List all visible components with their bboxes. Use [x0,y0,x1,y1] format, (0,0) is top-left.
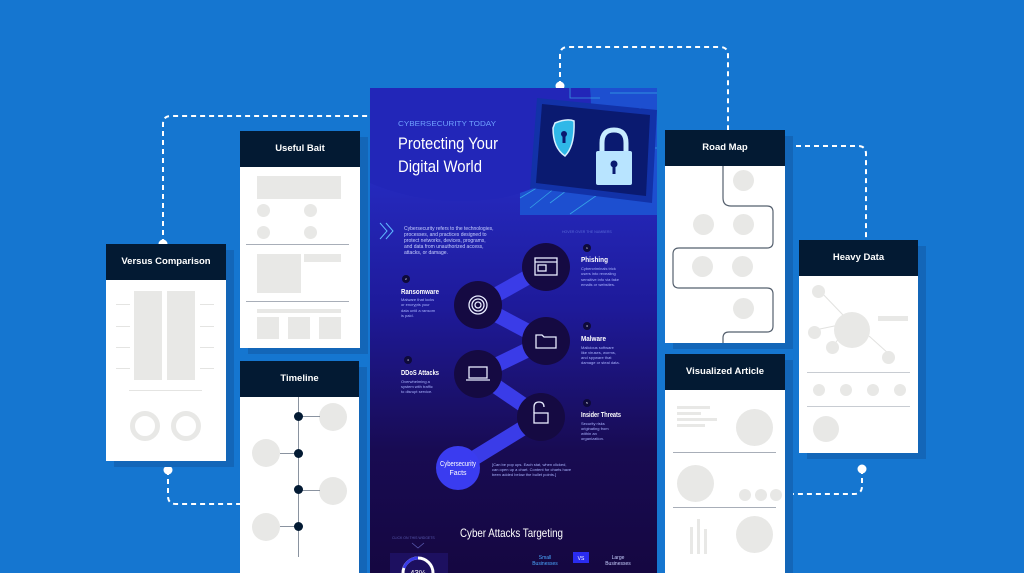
labels: 3 [586,324,588,328]
title: Digital World [398,157,482,176]
card: Timeline: Timeline [280,373,319,384]
card: Heavy Data: Heavy Data [833,252,884,263]
card: Heavy Data [799,240,918,453]
intro text: attacks, or damage. [404,250,448,256]
card: Visualized Article [665,354,785,573]
card: Road Map: Road Map [702,142,748,153]
labels: originating from [581,426,609,431]
labels [401,244,621,477]
labels: Insider Threats [581,410,621,419]
labels: emails or websites. [581,282,615,287]
zigzag diagram: Facts [449,470,467,477]
labels: Malware that locks [401,297,434,302]
labels: Ransomware [401,287,439,296]
card: Visualized Article: Visualized Article [686,366,764,377]
section: Cyber Attacks Targeting: VS [578,556,585,562]
labels: or encrypts your [401,302,430,307]
labels: to disrupt service. [401,389,432,394]
intro text: protect networks, devices, programs, [404,238,486,244]
labels: Malware [581,334,606,343]
labels: and spyware that [581,355,612,360]
card: Timeline [240,361,359,573]
labels: Malicious software [581,345,615,350]
title: CYBERSECURITY TODAY [398,119,496,128]
card: Road Map [665,130,785,343]
section: Cyber Attacks Targeting: Businesses [532,561,558,567]
labels: Cybercriminals trick [581,266,616,271]
section: Cyber Attacks Targeting: Large [612,555,625,561]
intro text [380,223,612,256]
section: Cyber Attacks Targeting: Small [539,555,551,561]
labels: 4 [407,358,409,362]
title [398,119,498,176]
labels: damage or steal data. [581,360,620,365]
labels: data until a ransom [401,308,436,313]
icon: shield [553,120,574,156]
labels: sensitive info via fake [581,277,620,282]
labels: users into revealing [581,271,616,276]
central infographic panel [370,88,657,573]
card: Useful Bait [240,131,360,348]
card: Useful Bait: Useful Bait [275,143,325,154]
zigzag diagram: Cybersecurity [440,461,476,468]
hero image: circuit & laptop [370,88,657,215]
labels: 2 [405,277,407,281]
title: Protecting Your [398,134,498,153]
card: Versus Comparison [106,244,226,461]
labels: is paid. [401,313,414,318]
labels: Security risks [581,421,605,426]
intro text: HOVER OVER THE NUMBERS [562,230,612,234]
labels: like viruses, worms, [581,350,616,355]
intro text: and data from unauthorized access, [404,244,484,250]
icon: padlock [602,130,626,153]
section: Cyber Attacks Targeting: CLICK ON THIS WIDGETS [392,536,435,540]
labels: DDoS Attacks [401,368,439,377]
intro text: Cybersecurity refers to the technologies, [404,226,494,232]
zigzag diagram [436,243,570,490]
intro text: processes, and practices designed to [404,232,487,238]
labels: Phishing [581,255,608,264]
labels: organization. [581,436,604,441]
labels: within an [581,431,597,436]
section: Cyber Attacks Targeting: Cyber Attacks Targeting [460,526,563,540]
labels: been added below the bullet points.] [492,472,556,477]
labels: 5 [586,401,588,405]
labels: Overwhelming a [401,379,431,384]
labels: 1 [586,246,588,250]
card: Versus Comparison: Versus Comparison [121,256,211,267]
section: Cyber Attacks Targeting: Businesses [605,561,631,567]
labels: [Can be pop ups. Each stat, when clicked, [492,462,566,467]
labels: system with traffic [401,384,433,389]
labels: can open up a chart. Content for charts have [492,467,572,472]
section: Cyber Attacks Targeting [390,526,631,573]
